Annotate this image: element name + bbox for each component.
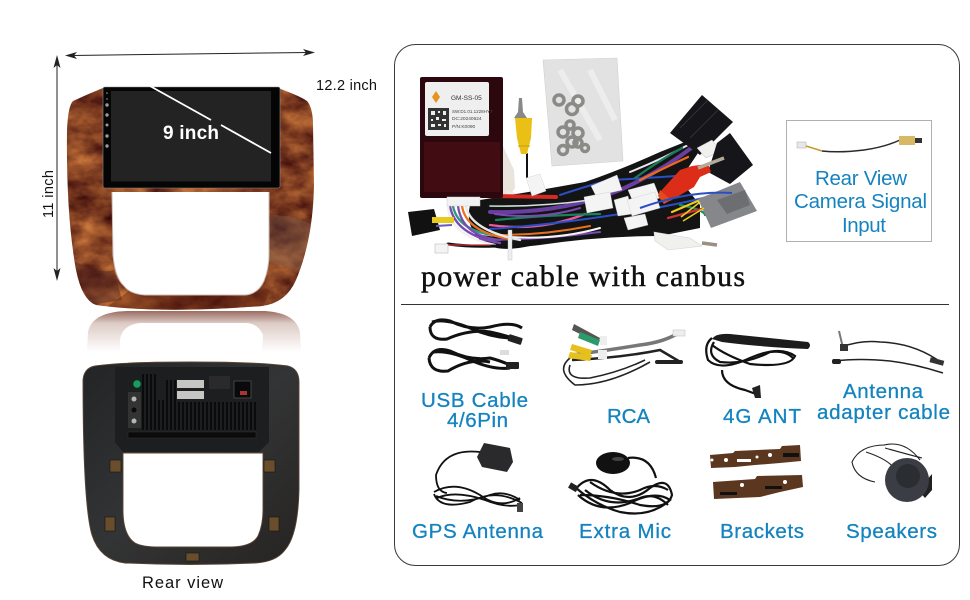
label: Extra Mic: [579, 520, 671, 543]
reflection: [87, 311, 301, 352]
label: 4G ANT: [723, 405, 801, 428]
label: rear view: Rear view: [142, 574, 223, 592]
screws: [554, 95, 588, 154]
box connector: [447, 197, 480, 206]
text: Input: Input: [842, 214, 886, 237]
wire labels: [526, 174, 660, 230]
white RCA plug: [654, 232, 717, 250]
version text: SW:D1.01.1228HYT: [452, 109, 493, 114]
label: USB Cable: [421, 389, 528, 412]
bezel side buttons: [105, 92, 109, 148]
hole trim: [112, 192, 269, 295]
power harness photo: P/N:K0090: [452, 124, 476, 130]
yellow RCA plug: [514, 98, 532, 154]
item: RCA cable: [564, 324, 685, 428]
power harness photo: [408, 58, 757, 260]
dimension arrow: width: [65, 49, 315, 59]
left black connector: [408, 209, 454, 236]
item: USB cable: 4/6Pin: [447, 409, 508, 432]
label: 9 inch: 9 inch: [163, 123, 219, 144]
label: RCA: [607, 405, 650, 428]
rear view camera input box: [786, 120, 932, 242]
text: Camera Signal: Camera Signal: [794, 190, 927, 213]
black connector: [234, 381, 251, 398]
screw bag: [543, 58, 623, 166]
model text: GM-SS-05: [451, 95, 482, 102]
lower black connector: [708, 133, 753, 184]
small white plug: [435, 244, 448, 253]
vents: [143, 374, 255, 430]
blue wires over connector: [640, 193, 732, 208]
diagonal line: [150, 86, 271, 153]
heading: power cable with canbus: power cable with canbus: [421, 260, 745, 293]
rear port studs: [132, 396, 136, 424]
dimension arrow: height: [54, 55, 60, 281]
label: Speakers: [846, 520, 937, 543]
canbus box: [420, 77, 503, 198]
grey connector: [698, 182, 757, 228]
power harness photo: DC:20240624: [452, 116, 482, 122]
panel border: [394, 44, 960, 566]
red RCA plug: [658, 158, 724, 204]
text: Rear View: Rear View: [815, 167, 907, 190]
upper black connector: [670, 95, 733, 158]
screen: [111, 91, 271, 182]
label: 11 inch: 11 inch: [41, 170, 57, 218]
head unit: [115, 367, 269, 452]
label: Antenna: [843, 380, 924, 403]
item: antenna adapter cable: [817, 331, 950, 424]
wood trim frame: [66, 88, 314, 310]
wire bundle base: [469, 140, 700, 247]
rear frame: [83, 362, 299, 564]
item: USB cable: [421, 320, 528, 432]
item: brackets: [710, 445, 804, 543]
box label: [425, 82, 489, 136]
screen bezel: [103, 87, 280, 188]
logo: [432, 91, 440, 103]
QR code: [428, 108, 449, 130]
brown clips: [105, 460, 279, 561]
accessories panel: [394, 44, 960, 566]
white tape strip: [503, 146, 515, 198]
item: extra mic: [568, 452, 672, 543]
item: antenna adapter cable: adapter cable: [817, 401, 950, 424]
green port: [132, 380, 142, 388]
label: GPS Antenna: [412, 520, 544, 543]
wire bundle: [448, 144, 735, 247]
item: speakers: [846, 444, 937, 543]
item: GPS antenna: [412, 443, 544, 543]
label: 12.2 inch: 12.2 inch: [316, 78, 377, 94]
cable tie: [508, 230, 512, 260]
camera signal cable: [797, 136, 922, 152]
white connectors: [177, 380, 204, 388]
rear view of stereo panel: [83, 362, 299, 564]
label: Brackets: [720, 520, 804, 543]
item: 4G antenna: [706, 334, 810, 428]
front view of stereo panel: [60, 80, 320, 315]
